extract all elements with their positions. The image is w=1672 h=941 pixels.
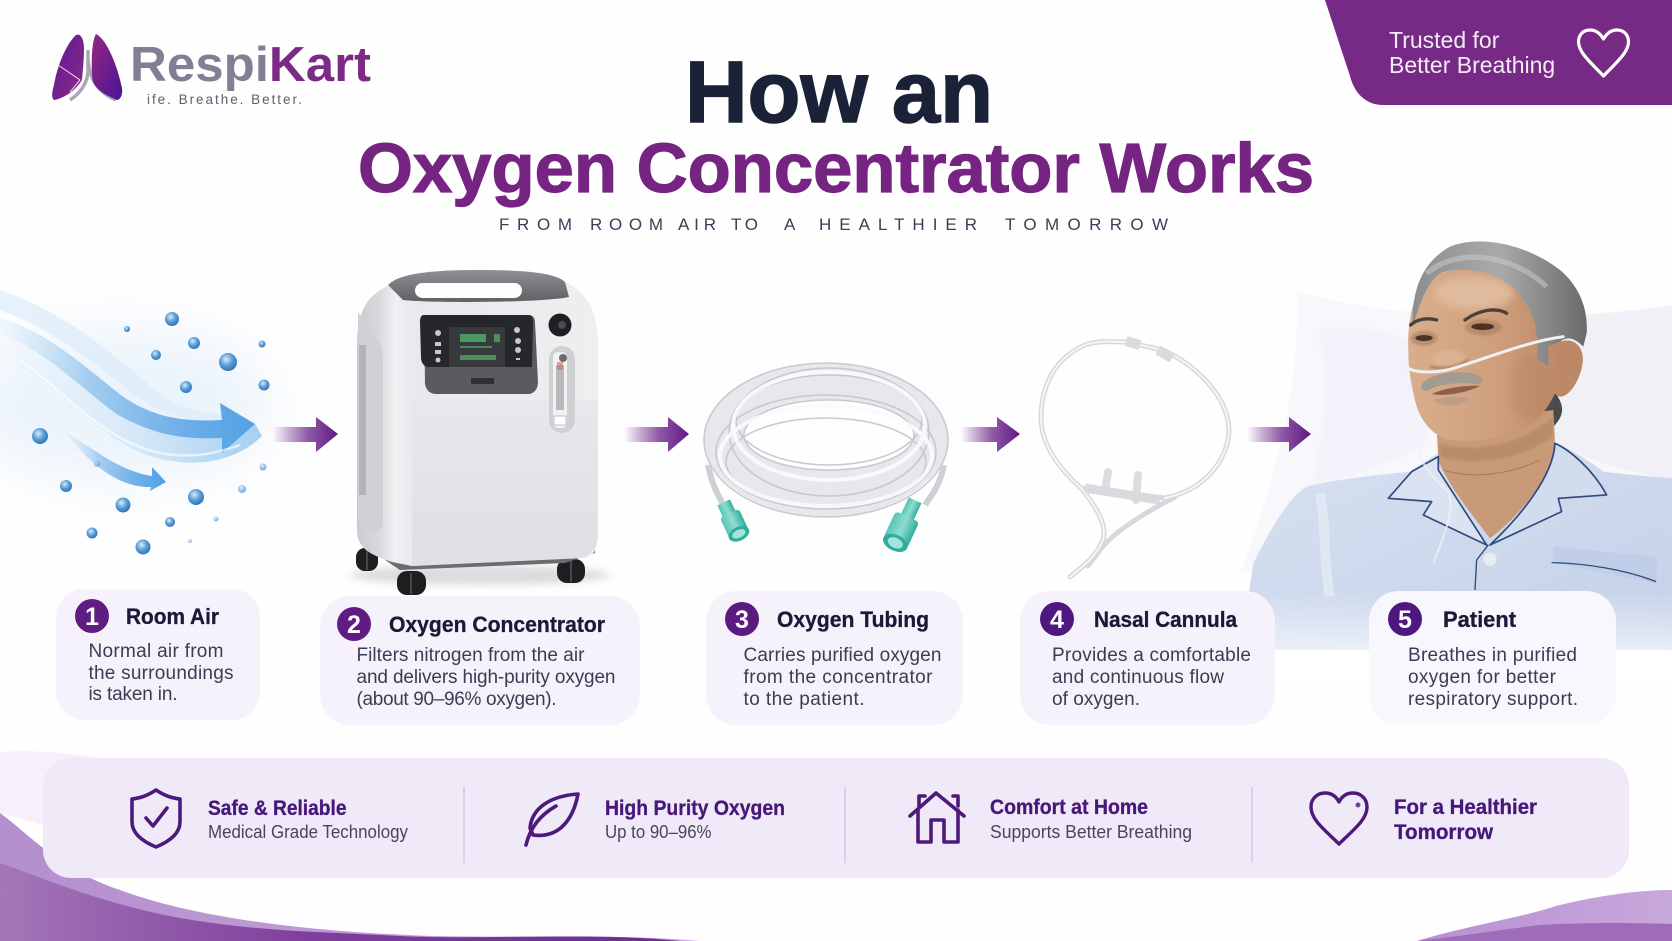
card 1 body: the surroundings (88, 663, 234, 684)
benefit: comfort at home: Supports Better Breathing (990, 822, 1192, 842)
high purity text: High Purity Oxygen (605, 797, 785, 820)
card 3 heading: Oxygen Tubing (777, 607, 929, 632)
subtitle: FROM (499, 215, 572, 234)
card 3: oxygen tubing (706, 591, 963, 725)
step number 5: 5 (1398, 606, 1412, 634)
mouth (1432, 386, 1480, 395)
card 3 body: from the concentrator (744, 667, 933, 688)
card 5 body: respiratory support. (1408, 689, 1578, 710)
coil body (704, 363, 948, 517)
card 1 body: Normal air from (88, 641, 224, 662)
base strip (385, 545, 595, 570)
air stream arrow main (0, 318, 255, 453)
benefit: safe and reliable (132, 790, 408, 847)
subtitle: ROOM (590, 215, 663, 234)
card 2: oxygen concentrator (320, 596, 640, 725)
step number 4: 4 (1050, 606, 1064, 634)
icon: lungs (52, 34, 122, 100)
badge text: Better Breathing (1389, 52, 1555, 78)
illustration: patient in bed (1220, 241, 1672, 687)
illustration: nasal cannula (1041, 341, 1229, 577)
neck (1437, 410, 1555, 538)
shirt (1240, 443, 1672, 650)
chin beard shade (1433, 397, 1470, 405)
air droplets (32, 312, 270, 554)
card 3 body: Carries purified oxygen (744, 645, 942, 666)
air stream lower band (0, 335, 262, 463)
safe and reliable text: Safe & Reliable (208, 797, 346, 820)
card 4 body: and continuous flow (1052, 667, 1224, 688)
flowmeter (549, 346, 575, 433)
nose shadow (1433, 350, 1465, 367)
ear (1553, 340, 1583, 397)
benefit: for a healthier tomorrow (1311, 793, 1537, 844)
illustration: oxygen tubing coil (704, 363, 948, 556)
nose prongs (1105, 472, 1138, 500)
arrow 3 (961, 417, 1020, 452)
moustache (1421, 372, 1483, 391)
step number 3 (725, 602, 759, 636)
logo wordmark: RespiKart (130, 38, 371, 92)
power knob (548, 314, 572, 336)
body shell (357, 283, 598, 566)
benefit: safe and reliable: Medical Grade Technology (208, 822, 408, 842)
card 3 body: to the patient. (744, 689, 864, 710)
icon: leaf (526, 794, 578, 845)
cheek shadow (1510, 353, 1550, 420)
card 4: nasal cannula (1020, 591, 1275, 725)
collar (1388, 457, 1487, 545)
badge: trusted for better breathing (1325, 0, 1672, 105)
arrow 4 (1247, 417, 1311, 452)
subtitle: A (784, 215, 796, 234)
healthier tomorrow text: Tomorrow (1394, 821, 1494, 844)
card 1 heading: Room Air (126, 604, 219, 629)
illustration: room air swirl (0, 290, 270, 554)
healthier tomorrow text: For a Healthier (1394, 796, 1537, 819)
eye sockets (1411, 331, 1437, 346)
bottom benefits panel (43, 758, 1629, 878)
step number 1 (75, 599, 109, 633)
step number 2: 2 (347, 611, 361, 639)
tube ends (708, 465, 724, 506)
wheels (356, 548, 585, 595)
card 5 body: Breathes in purified (1408, 645, 1577, 666)
benefit: comfort at home (910, 793, 1192, 842)
badge text: Trusted for (1389, 27, 1500, 53)
side vent panel (358, 312, 383, 533)
subtitle: HEALTHIER (819, 215, 977, 234)
logo tagline: ife. Breathe. Better. (147, 92, 302, 107)
title (358, 44, 1314, 207)
subtitle: TO (731, 215, 758, 234)
eyes (1415, 335, 1433, 341)
background bottom waves (0, 751, 1672, 941)
front face (412, 400, 598, 566)
teal connector left (714, 497, 752, 545)
air stream upper wisps (0, 290, 225, 421)
fade into background (1220, 590, 1672, 687)
eyebrows (1411, 310, 1507, 325)
face (1408, 269, 1567, 441)
card 5 body: oxygen for better (1408, 667, 1557, 688)
card 2 heading: Oxygen Concentrator (389, 612, 605, 637)
hair back (1540, 390, 1562, 427)
comfort text: Comfort at Home (990, 796, 1148, 819)
forehead highlight (1433, 277, 1513, 310)
step number 3: 3 (735, 606, 749, 634)
step number 2 (337, 607, 371, 641)
subtitle: AIR (678, 215, 716, 234)
card 4 heading: Nasal Cannula (1094, 607, 1238, 632)
logo: RespiKart (52, 34, 371, 107)
nasal cannula on face (1408, 337, 1563, 372)
illustration: oxygen concentrator (350, 270, 610, 595)
hair (1413, 241, 1587, 367)
step number 4 (1040, 602, 1074, 636)
card 1 body: is taken in. (88, 684, 178, 705)
handle (388, 270, 569, 302)
icon: heart (1311, 793, 1367, 844)
arrow 1 (273, 417, 338, 452)
icon: heart outline (1578, 30, 1628, 76)
card 5: patient (1369, 591, 1616, 725)
icon: shield check (132, 790, 180, 847)
icon: house (910, 793, 964, 842)
step number 5 (1388, 602, 1422, 636)
card 1: room air (56, 589, 260, 720)
subtitle: TOMORROW (1005, 215, 1168, 234)
handle opening (415, 283, 522, 298)
title line 1: How an (685, 44, 993, 141)
card 4 body: of oxygen. (1052, 689, 1140, 710)
card 5 heading: Patient (1443, 607, 1517, 632)
card 2 body: and delivers high-purity oxygen (356, 667, 616, 688)
title line 2: Oxygen Concentrator Works (358, 129, 1314, 207)
benefit: high purity oxygen (526, 794, 785, 845)
air stream arrow small (65, 432, 166, 491)
card 4 body: Provides a comfortable (1052, 645, 1251, 666)
arrow 2 (624, 417, 689, 452)
card 2 body: Filters nitrogen from the air (356, 645, 585, 666)
pillow (1240, 291, 1672, 573)
teal connector right (880, 495, 927, 556)
card 2 body: (about 90–96% oxygen). (356, 689, 556, 710)
shirt placket and pocket (1475, 545, 1488, 590)
step number 1: 1 (85, 603, 99, 631)
control panel (420, 315, 538, 394)
benefit: high purity oxygen: Up to 90–96% (605, 822, 712, 842)
display screen (449, 327, 505, 367)
